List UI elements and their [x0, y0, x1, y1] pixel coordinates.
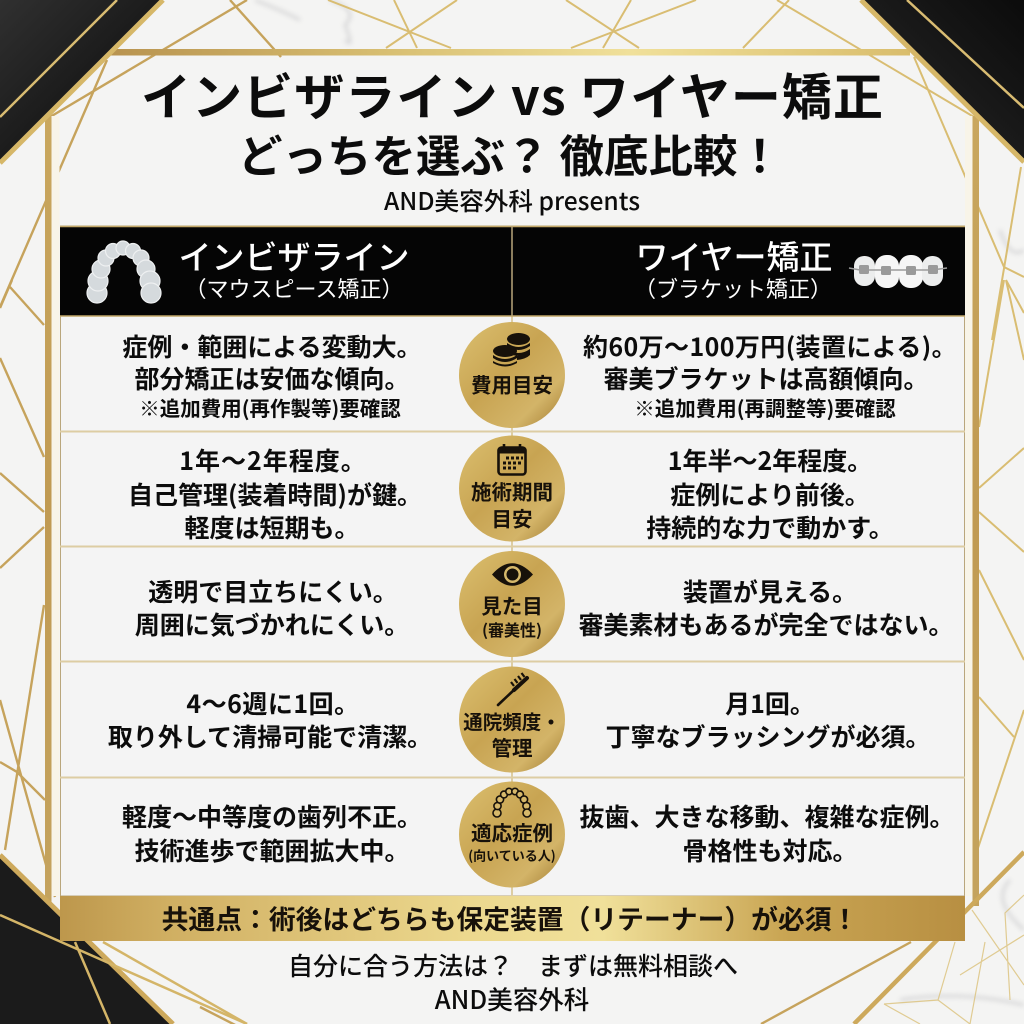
indications wire text [579, 798, 955, 868]
cost wire text: 審美ブラケットは高額傾向。 [603, 360, 929, 396]
cost wire text [583, 328, 957, 422]
appearance invisalign text [135, 573, 409, 642]
icon: clear aligner [87, 241, 161, 303]
call to action: AND美容外科 [435, 980, 589, 1017]
presenter line: AND美容外科 presents [384, 182, 640, 218]
appearance invisalign text: 透明で目立ちにくい。 [148, 573, 398, 609]
duration badge [459, 436, 565, 542]
cost invisalign text: 部分矯正は安価な傾向。 [134, 360, 410, 396]
visits badge: 通院頻度・ [463, 706, 561, 735]
black corner: top left [0, 0, 163, 163]
call to action [288, 947, 738, 1017]
duration invisalign text: 1年～2年程度。 [179, 442, 367, 478]
visits wire text [605, 685, 931, 754]
duration wire text: 症例により前後。 [670, 476, 870, 512]
icon: dental arch [493, 788, 531, 817]
indications badge [459, 782, 565, 888]
visits invisalign text: 取り外して清掃可能で清潔。 [108, 718, 432, 754]
heading: invisalign: インビザライン [178, 231, 410, 279]
appearance wire text: 装置が見える。 [683, 573, 857, 609]
icon: eye [492, 563, 533, 586]
visits wire text: 月1回。 [725, 685, 815, 721]
visits wire text: 丁寧なブラッシングが必須。 [605, 718, 931, 754]
visits invisalign text [108, 685, 432, 754]
indications badge: 適応症例 [471, 816, 553, 846]
appearance invisalign text: 周囲に気づかれにくい。 [135, 606, 409, 642]
comparison table [60, 226, 965, 896]
duration invisalign text: 軽度は短期も。 [184, 509, 360, 545]
common point banner [60, 896, 965, 941]
title: インビザライン vs ワイヤー矯正 [141, 58, 883, 130]
title [141, 58, 883, 218]
appearance wire text: 審美素材もあるが完全ではない。 [578, 606, 954, 642]
duration wire text: 持続的な力で動かす。 [646, 509, 894, 545]
subtitle: どっちを選ぶ？ 徹底比較！ [238, 120, 782, 185]
row: duration [128, 436, 894, 545]
row: visits [108, 666, 931, 772]
duration badge: 施術期間 [471, 476, 553, 506]
cost wire text: 約60万～100万円(装置による)。 [583, 328, 957, 364]
indications invisalign text: 軽度～中等度の歯列不正。 [122, 798, 422, 834]
duration badge: 目安 [492, 502, 532, 532]
cost invisalign text [122, 328, 422, 422]
black corner: top right [861, 0, 1024, 162]
duration wire text: 1年半～2年程度。 [668, 442, 872, 478]
heading: wire: ワイヤー矯正 [635, 231, 833, 279]
appearance badge: 見た目 [481, 590, 543, 620]
appearance badge: (審美性) [482, 617, 542, 641]
subheading: wire: （ブラケット矯正） [634, 272, 832, 304]
icon: coins [493, 333, 530, 366]
visits invisalign text: 4～6週に1回。 [186, 685, 360, 721]
row: appearance [135, 551, 954, 657]
indications invisalign text [122, 798, 422, 868]
table header [60, 226, 965, 316]
centre divider [511, 316, 513, 896]
cost wire text: ※追加費用(再調整等)要確認 [634, 392, 896, 422]
indications wire text: 骨格性も対応。 [682, 832, 858, 868]
duration invisalign text: 自己管理(装着時間)が鍵。 [128, 476, 422, 512]
cost badge [459, 322, 565, 428]
duration invisalign text [128, 442, 422, 545]
appearance wire text [578, 573, 954, 642]
indications invisalign text: 技術進歩で範囲拡大中。 [134, 832, 410, 868]
icon: calendar [498, 444, 526, 474]
indications badge: (向いている人) [468, 846, 556, 864]
subheading: invisalign: （マウスピース矯正） [185, 272, 403, 304]
icon: braces [849, 255, 947, 288]
common point banner: 共通点：術後はどちらも保定装置（リテーナー）が必須！ [162, 898, 858, 937]
table body [60, 226, 964, 896]
icon: toothbrush [498, 673, 527, 705]
cost invisalign text: ※追加費用(再作製等)要確認 [139, 392, 401, 422]
visits badge: 管理 [492, 732, 532, 762]
row: indications [122, 782, 955, 888]
indications wire text: 抜歯、大きな移動、複雑な症例。 [579, 798, 955, 834]
duration wire text [646, 442, 894, 545]
gold corner line: bottom right [854, 852, 1024, 1024]
cost invisalign text: 症例・範囲による変動大。 [122, 328, 422, 364]
visits badge [459, 666, 565, 772]
call to action: 自分に合う方法は？ まずは無料相談へ [288, 947, 738, 983]
row dividers [60, 432, 965, 778]
row: cost [122, 322, 957, 428]
cost badge: 費用目安 [471, 368, 553, 398]
frame: gold border [45, 49, 979, 906]
appearance badge [459, 551, 565, 657]
black corner: bottom left [0, 855, 247, 1024]
